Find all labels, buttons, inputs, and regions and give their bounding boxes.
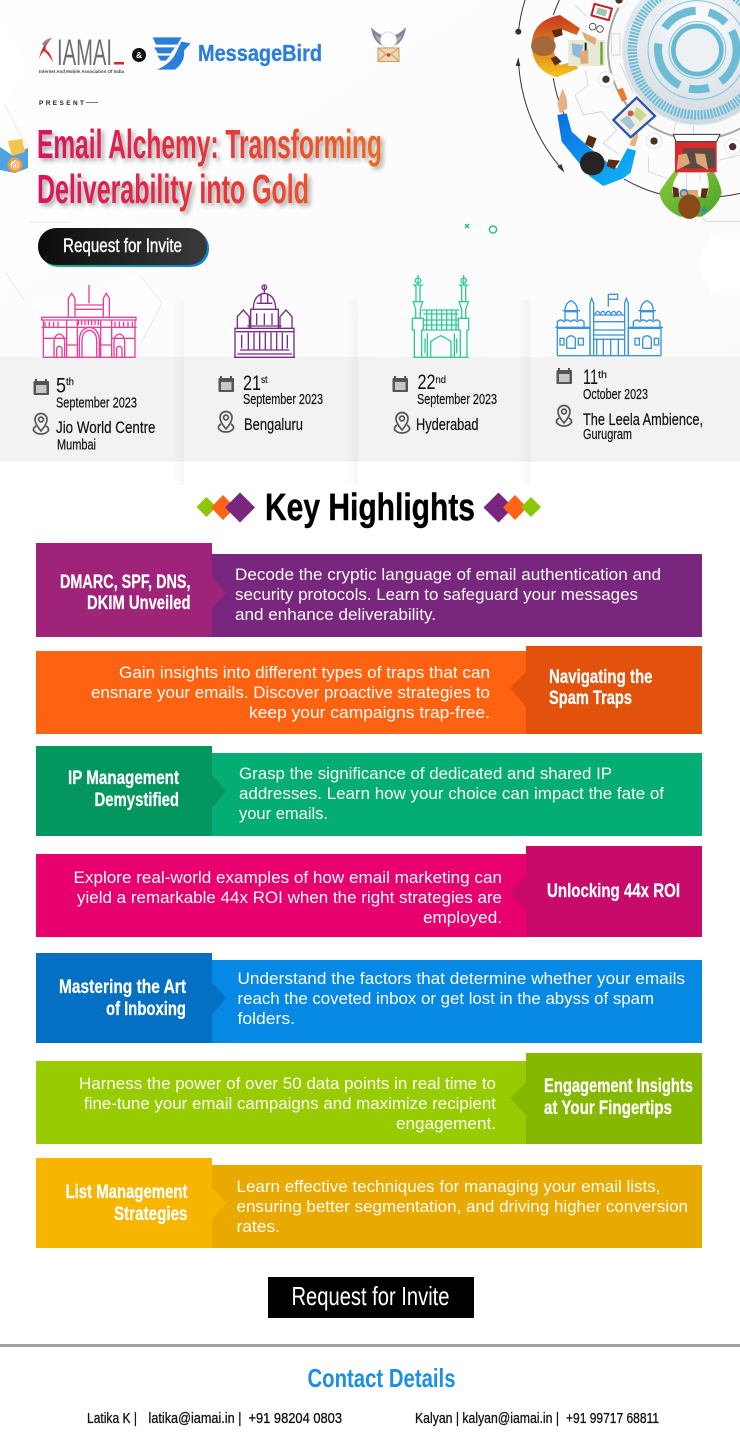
button: request for invite (bottom): Request for Invite [292,1281,450,1311]
description [239,765,664,823]
date: September 2023 [417,392,497,408]
highlight: spam traps [36,646,702,734]
heading: key highlights: Key Highlights [265,487,475,529]
logo: MessageBird [153,37,322,70]
description [235,566,661,624]
heading: Demystified [94,789,179,811]
description: fine-tune your email campaigns and maximize recipient [84,1095,496,1113]
description [74,869,502,927]
description: Understand the factors that determine whether your emails [238,970,685,988]
highlight: list management [36,1158,702,1248]
contact: Kalyan: Kalyan | kalyan@iamai.in | [415,1410,559,1427]
heading: Engagement Insights [544,1075,693,1097]
contact: Latika: latika@iamai.in | [148,1410,242,1427]
date: th [66,376,74,388]
highlight: 44x ROI [36,846,702,937]
description: ensnare your emails. Discover proactive strategies to [91,684,490,702]
icon: location pin [394,412,410,433]
heading: List Management [66,1181,188,1203]
heading: of Inboxing [106,998,186,1020]
description: ensuring better segmentation, and driving higher conversion [236,1198,688,1216]
date [583,366,648,403]
contact: Latika: +91 98204 0803 [248,1410,342,1427]
person: blue [557,88,655,186]
description: rates. [236,1218,280,1236]
description [238,970,685,1028]
date: 5 [56,374,66,398]
icon: location pin [33,414,49,434]
heading [66,1181,188,1225]
icon: winged envelope [371,27,406,62]
description: your emails. [239,805,328,823]
description: Explore real-world examples of how email marketing can [74,869,502,887]
heading: DMARC, SPF, DNS, [60,571,190,593]
heading: Unlocking 44x ROI [547,880,680,902]
logo: IAMAI [39,32,124,74]
icon: calendar [34,379,49,395]
event strip background [0,300,740,485]
date [417,371,497,408]
heading: Spam Traps [549,687,632,709]
button: request for invite (top): Request for Invite [63,235,182,257]
person: green [659,134,722,219]
description [79,1075,496,1133]
description: reach the coveted inbox or get lost in the abyss of spam [238,990,654,1008]
icon: Vidhana Soudha [234,285,295,357]
description: Harness the power of over 50 data points in real time to [79,1075,496,1093]
description [91,664,490,722]
heading: IP Management [68,767,179,789]
description [236,1178,688,1236]
highlight: IP management [36,746,702,836]
date: September 2023 [243,392,323,408]
date [243,372,323,408]
illustration: team around a digital hub [515,0,740,222]
heading: Mastering the Art [59,976,186,998]
date: st [261,374,268,386]
highlight: engagement insights [36,1053,702,1144]
logo: IAMAI: IAMAI [57,32,112,73]
description: addresses. Learn how your choice can impact the fate of [239,785,664,803]
person: orange [531,15,605,77]
panel: Gurugram event [555,294,703,443]
icon: calendar [556,368,572,384]
heading: contact details: Contact Details [308,1363,456,1393]
icon: email with megaphone [0,139,28,173]
description: employed. [423,909,502,927]
description: Gain insights into different types of traps that can [119,664,490,682]
icon: calendar [392,376,408,392]
description: Learn effective techniques for managing your email lists, [236,1178,660,1196]
title: Deliverability into Gold [37,166,309,212]
venue: The Leela Ambience, [583,411,703,429]
date: 21 [243,372,261,395]
heading: DKIM Unveiled [87,592,190,614]
heading: Navigating the [549,666,653,688]
button: request for invite (top) [38,228,209,267]
decorative marks [465,224,497,233]
date: nd [436,374,446,386]
description: and enhance deliverability. [235,606,436,624]
date: th [598,369,607,381]
description: keep your campaigns trap-free. [249,704,490,722]
description: security protocols. Learn to safeguard your messages [235,586,638,604]
kicker: present: PRESENT [39,100,84,107]
icon: location pin [556,406,572,426]
description: Grasp the significance of dedicated and shared IP [239,765,612,783]
date: 11 [583,366,598,389]
icon: Red Fort [555,294,663,356]
title [37,121,382,212]
heading [59,976,186,1020]
heading [549,666,653,709]
venue: Hyderabad [416,416,478,434]
panel: Hyderabad event [392,275,497,434]
ampersand badge [132,48,146,62]
venue: Mumbai [57,438,96,454]
description: folders. [238,1010,295,1028]
date: September 2023 [56,396,137,412]
venue [583,411,703,443]
venue: Jio World Centre [56,419,156,437]
description: engagement. [396,1115,496,1133]
icon: location pin [218,412,234,432]
button: request for invite (bottom) [268,1277,474,1318]
heading: at Your Fingertips [544,1097,672,1119]
panel: Mumbai event [33,285,155,454]
description: yield a remarkable 44x ROI when the right strategies are [77,889,502,907]
contact: Kalyan: +91 99717 68811 [566,1410,659,1427]
date [56,374,137,412]
venue: Gurugram [583,427,632,443]
panel: Bengaluru event [218,285,323,434]
icon: calendar [218,376,234,392]
venue: Bengaluru [244,416,303,434]
logo: MessageBird: MessageBird [198,40,322,66]
date: 22 [418,371,436,394]
ampersand badge: & [136,50,142,60]
highlight: inboxing [36,953,702,1043]
title: Email Alchemy: Transforming [37,121,382,167]
heading [68,767,179,811]
highlight: DMARC [36,543,702,637]
icon: email with megaphone: @ [12,161,20,170]
logo: IAMAI: Internet And Mobile Association Of India [39,69,124,74]
contact: Latika [87,1410,342,1427]
heading: Strategies [114,1203,188,1225]
description: Decode the cryptic language of email authentication and [235,566,661,584]
date: October 2023 [583,387,648,403]
icon: Charminar [412,275,469,357]
contact: Latika: Latika K | [87,1410,137,1427]
heading [544,1075,693,1119]
heading [60,571,190,614]
venue [56,419,156,454]
icon: Gateway of India [42,285,137,357]
